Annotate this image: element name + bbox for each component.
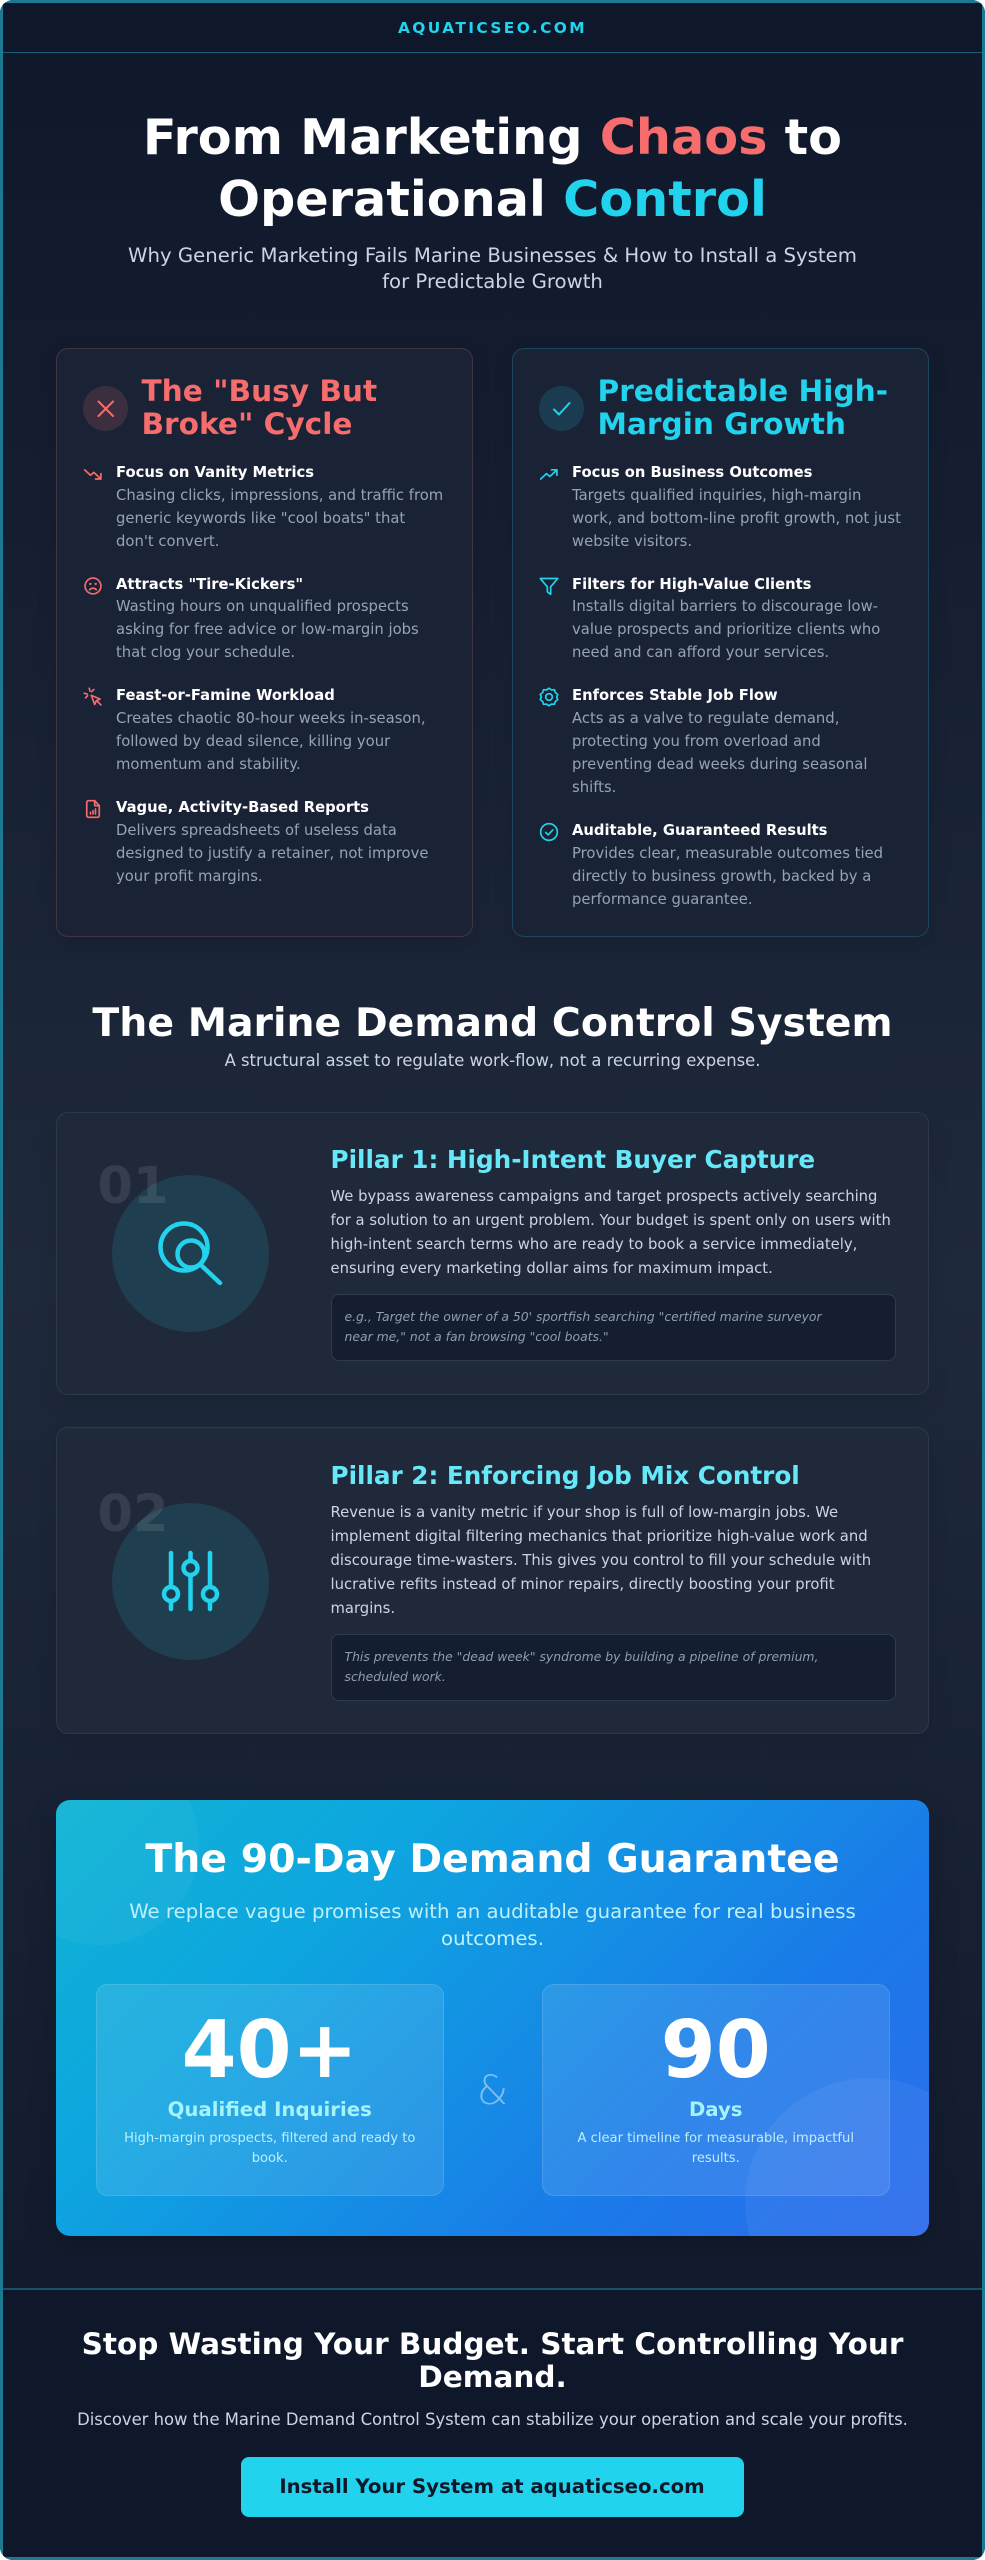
item: guaranteed results (540, 822, 883, 908)
subtitle: for Predictable Growth (382, 270, 603, 292)
text: high value clients: need and can afford your services. (572, 644, 829, 661)
pillar 2 text: lucrative refits instead of minor repairs, directly boosting your profit (330, 1576, 835, 1593)
main title: Operational Control (218, 170, 767, 228)
text: feast or famine: followed by dead silence, killing your (116, 732, 390, 750)
text: vague reports: your profit margins. (116, 868, 263, 884)
pillar 2 note: scheduled work. (344, 1668, 446, 1684)
icon: sad face (84, 577, 102, 595)
item: stable job flow (539, 687, 867, 796)
item: business outcomes (540, 464, 901, 550)
text: stable job flow: shifts. (572, 778, 616, 796)
text: tire kickers: Wasting hours on unqualified prospects (116, 598, 409, 615)
button: install your system (240, 2457, 744, 2517)
section subheading: A structural asset to regulate work-flow, not a recurring expense. (225, 1051, 760, 1070)
text: guaranteed results: Provides clear, measurable outcomes tied (572, 844, 883, 862)
pillar 1 text: high-intent search terms who are ready to book a service immediately, (330, 1236, 857, 1253)
text: vanity metrics: Chasing clicks, impressions, and traffic from (116, 486, 443, 504)
pillar 1 example note (330, 1294, 896, 1361)
pillar 1 text: We bypass awareness campaigns and target prospects actively searching (330, 1188, 877, 1205)
panel: pillar 2 (56, 1427, 929, 1734)
pillar 1 title: Pillar 1: High-Intent Buyer Capture (330, 1145, 815, 1174)
text: vague reports: Delivers spreadsheets of useless data (116, 822, 397, 838)
text: stable job flow: Acts as a valve to regulate demand, (572, 710, 839, 726)
icon: check circle (540, 822, 558, 842)
stat number 40+: 40+ (182, 2004, 358, 2096)
text: vanity metrics: generic keywords like "cool boats" that (116, 510, 405, 526)
text: business outcomes: Focus on Business Outcomes (572, 464, 812, 481)
guarantee subtitle: We replace vague promises with an auditable guarantee for real business (129, 1900, 856, 1923)
pillar 2 text: implement digital filtering mechanics that prioritize high-value work and (330, 1528, 868, 1545)
item: vague reports (86, 799, 428, 884)
footer heading: Stop Wasting Your Budget. Start Controlling Your (82, 2326, 903, 2360)
icon: cursor click (83, 687, 102, 706)
text: high value clients: Installs digital barriers to discourage low- (572, 598, 878, 615)
panel: busy but broke cycle (56, 348, 473, 937)
footer heading (82, 2326, 904, 2394)
stat label: Days (689, 2098, 743, 2121)
text: high value clients: Filters for High-Value Clients (572, 576, 811, 592)
text: vague reports (116, 799, 428, 884)
stat: 40+ inquiries (96, 1984, 444, 2196)
icon: magnifier in circle (112, 1175, 268, 1332)
icon: sliders in circle (112, 1503, 268, 1660)
section heading: system: The Marine Demand Control System (92, 1000, 893, 1046)
item: feast or famine (83, 687, 426, 772)
text: vague reports: Vague, Activity-Based Reports (116, 799, 369, 816)
text: feast or famine: Creates chaotic 80-hour weeks in-season, (116, 710, 426, 726)
number 01: 01 (98, 1157, 168, 1216)
pillar 1 text: ensuring every marketing dollar aims for maximum impact. (330, 1260, 773, 1277)
guarantee subtitle: outcomes. (441, 1927, 544, 1950)
pillar 1 example note: near me," not a fan browsing "cool boats." (344, 1328, 609, 1344)
text: vanity metrics: don't convert. (116, 532, 219, 550)
text: vanity metrics (116, 464, 443, 550)
text: guaranteed results: performance guarantee. (572, 890, 753, 908)
pillar 1 example note: e.g., Target the owner of a 50' sportfish searching "certified marine surveyor (344, 1308, 822, 1324)
decorative circle bottom right (745, 2078, 985, 2328)
heading: busy but broke: The "Busy But (142, 374, 377, 408)
main title: From Marketing Chaos to (143, 108, 842, 166)
icon: x in circle (83, 386, 128, 431)
text: vanity metrics: Focus on Vanity Metrics (116, 464, 314, 481)
text: tire kickers (116, 576, 419, 661)
guarantee subtitle (129, 1900, 856, 1950)
footer call to action (3, 2288, 982, 2557)
text: tire kickers: asking for free advice or low-margin jobs (116, 621, 419, 638)
panel: 90-day guarantee (56, 1800, 929, 2236)
icon: document chart (86, 800, 100, 818)
pillar 2 text (330, 1504, 871, 1617)
stat description: High-margin prospects, filtered and ready to (124, 2131, 415, 2146)
number 02: 02 (98, 1485, 168, 1544)
text: feast or famine (116, 687, 426, 772)
stat number 90: 90 (661, 2004, 771, 2096)
pillar 2 note: This prevents the "dead week" syndrome by building a pipeline of premium, (344, 1648, 818, 1664)
pillar 1 text (330, 1188, 891, 1277)
panel: pillar 1 (56, 1112, 929, 1395)
heading: predictable growth (598, 374, 888, 441)
text: business outcomes: work, and bottom-line profit growth, not just (572, 510, 901, 526)
ampersand: & (477, 2068, 508, 2114)
icon: gear (539, 687, 559, 707)
text: feast or famine: Feast-or-Famine Workload (116, 687, 335, 704)
main title (143, 108, 842, 228)
button: install your system: Install Your System at aquaticseo.com (279, 2475, 705, 2498)
text: guaranteed results: directly to business growth, backed by a (572, 868, 871, 884)
stat description: book. (252, 2151, 288, 2166)
stat description: A clear timeline for measurable, impactful (578, 2131, 854, 2146)
icon: funnel (539, 578, 559, 596)
icon: trending down (84, 469, 102, 480)
decorative circle top left (0, 1745, 199, 1945)
stat description (578, 2131, 854, 2166)
text: guaranteed results (572, 822, 883, 908)
icon: trending up (540, 469, 558, 480)
text: high value clients (572, 576, 880, 661)
text: business outcomes (572, 464, 901, 550)
text: guaranteed results: Auditable, Guaranteed Results (572, 822, 827, 839)
item: vanity metrics (84, 464, 443, 550)
text: stable job flow: preventing dead weeks during seasonal (572, 756, 867, 772)
text: tire kickers: Attracts "Tire-Kickers" (116, 576, 303, 592)
stat label: Qualified Inquiries (168, 2098, 372, 2121)
icon: check in circle (539, 386, 584, 431)
stat description (124, 2131, 415, 2166)
stat: 90 days (542, 1984, 890, 2196)
heading: predictable growth: Margin Growth (598, 407, 846, 441)
text: business outcomes: website visitors. (572, 532, 692, 550)
heading: predictable growth: Predictable High- (598, 374, 888, 408)
footer heading: Demand. (418, 2360, 567, 2394)
pillar 2 text: Revenue is a vanity metric if your shop is full of low-margin jobs. We (330, 1504, 838, 1521)
text: stable job flow: Enforces Stable Job Flow (572, 687, 778, 704)
brand name: AQUATICSEO.COM (398, 19, 587, 37)
text: tire kickers: that clog your schedule. (116, 644, 295, 661)
pillar 2 text: discourage time-wasters. This gives you control to fill your schedule with (330, 1552, 871, 1569)
text: high value clients: value prospects and prioritize clients who (572, 621, 880, 638)
guarantee heading: The 90-Day Demand Guarantee (145, 1836, 840, 1882)
pillar 2 title: Pillar 2: Enforcing Job Mix Control (330, 1461, 800, 1490)
footer text: Discover how the Marine Demand Control System can stabilize your operation and scale your profits. (77, 2410, 908, 2428)
heading: busy but broke (142, 374, 377, 441)
subtitle: Why Generic Marketing Fails Marine Businesses & How to Install a System (128, 244, 857, 267)
panel: predictable growth (512, 348, 929, 937)
text: business outcomes: Targets qualified inquiries, high-margin (572, 486, 861, 504)
stat description: results. (692, 2151, 740, 2166)
text: stable job flow: protecting you from overload and (572, 732, 821, 750)
text: stable job flow (572, 687, 867, 796)
pillar 2 text: margins. (330, 1600, 395, 1617)
item: high value clients (539, 576, 880, 661)
subtitle (128, 244, 857, 292)
text: vague reports: designed to justify a retainer, not improve (116, 844, 428, 862)
pillar 1 text: for a solution to an urgent problem. Your budget is spent only on users with (330, 1212, 891, 1229)
top brand bar (3, 3, 982, 53)
heading: busy but broke: Broke" Cycle (142, 407, 352, 441)
pillar 2 note (330, 1634, 896, 1701)
item: tire kickers (84, 576, 419, 661)
text: feast or famine: momentum and stability. (116, 756, 301, 772)
